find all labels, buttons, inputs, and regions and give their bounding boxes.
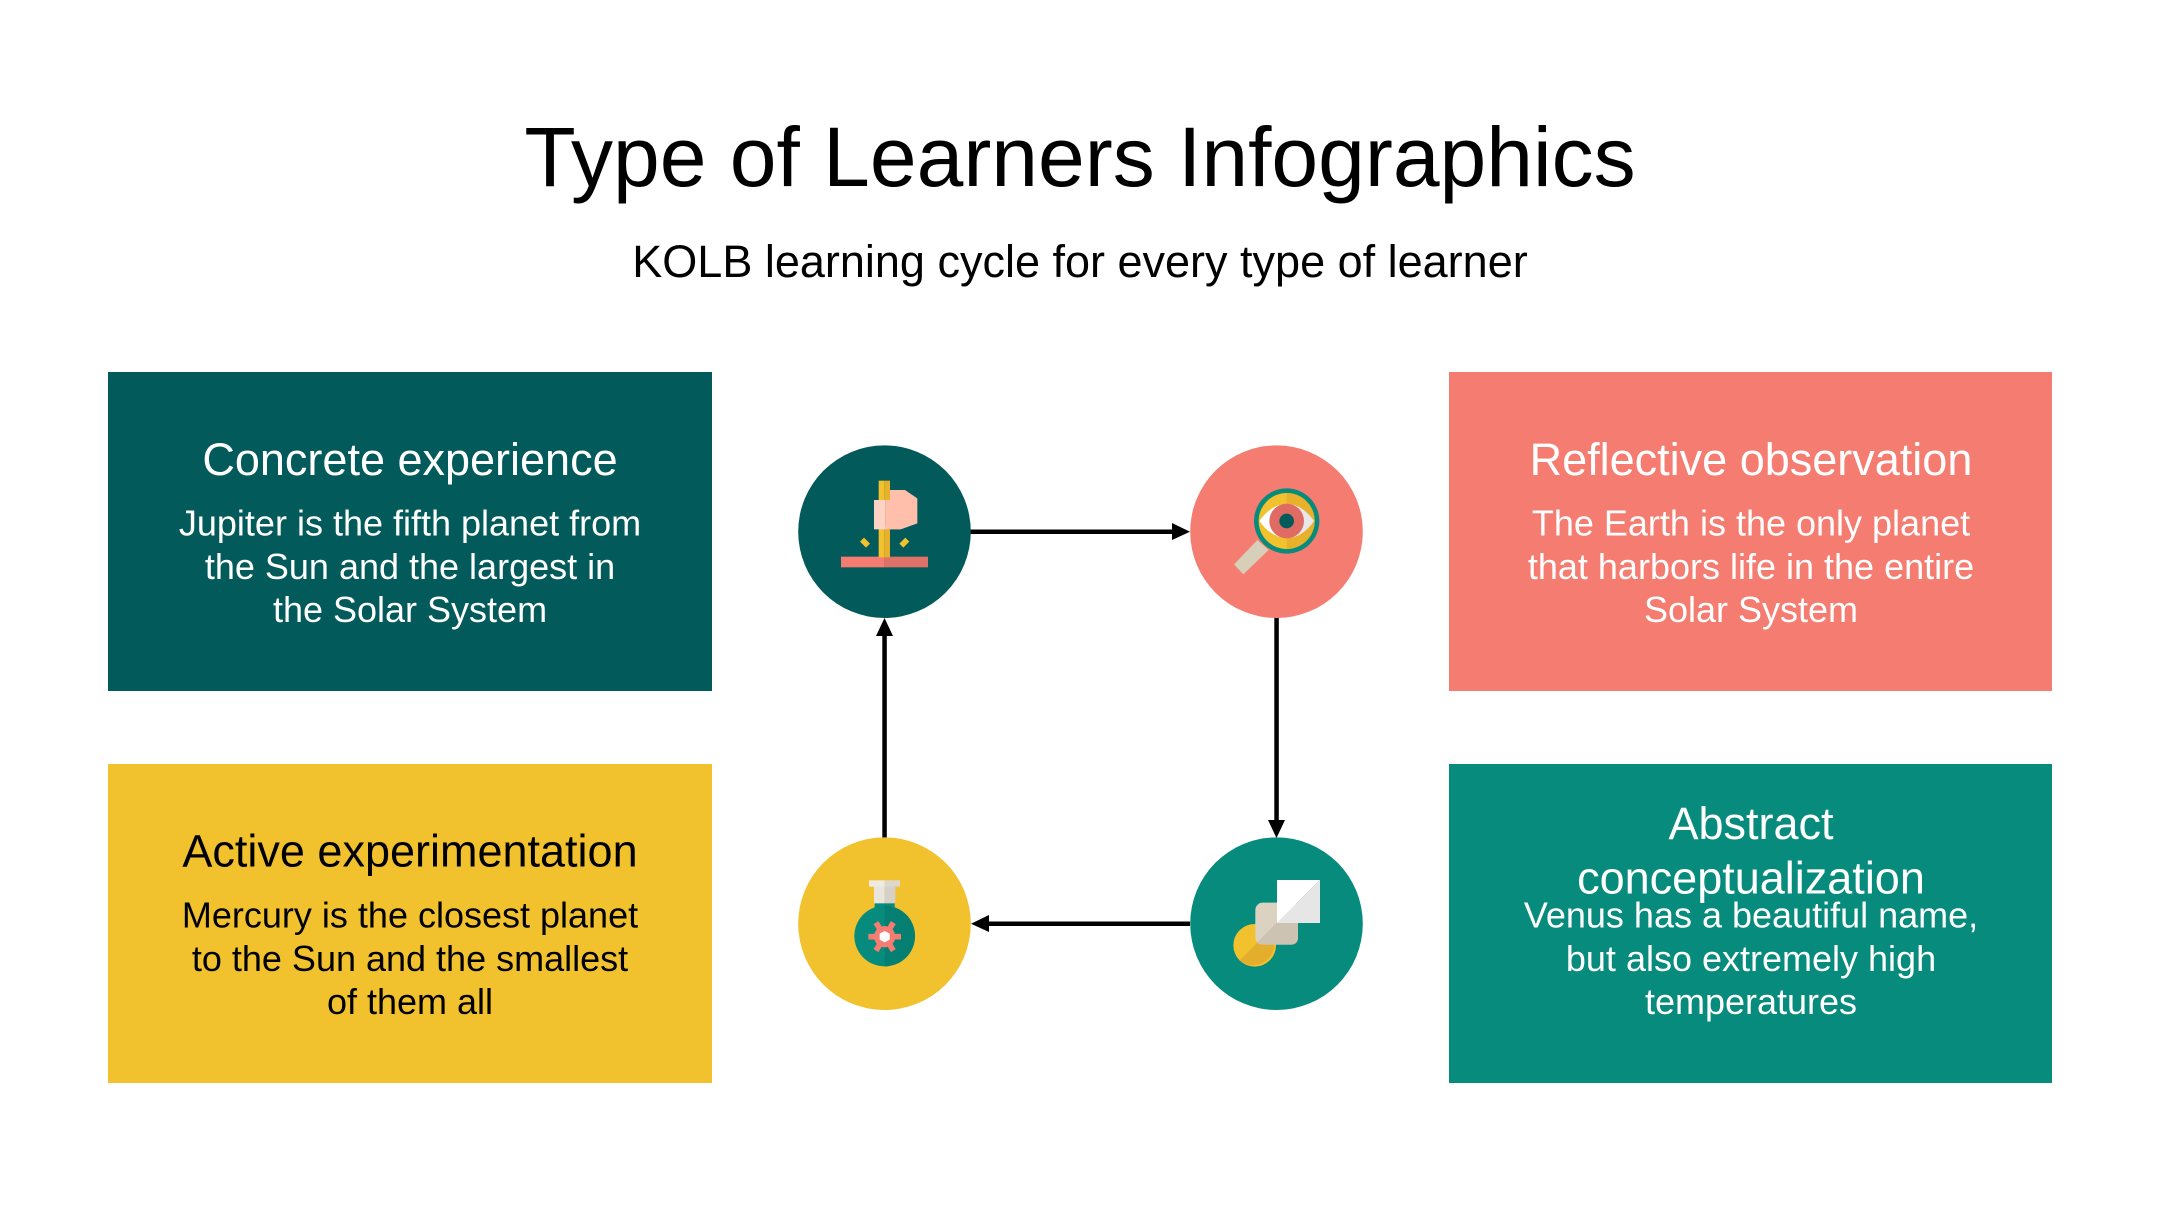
text: concrete experience description: the Solar System [273, 589, 547, 630]
text: abstract conceptualization description [1524, 894, 1978, 1022]
heading: abstract conceptualization: Abstract [1668, 798, 1834, 849]
heading: abstract conceptualization [1577, 798, 1925, 904]
arrow: abstract to active [971, 915, 1190, 932]
text: abstract conceptualization description: Venus has a beautiful name, [1524, 894, 1978, 936]
text: concrete experience description: Jupiter is the fifth planet from [179, 502, 641, 544]
text: concrete experience description: the Sun and the largest in [205, 546, 615, 587]
heading: concrete experience: Concrete experience [202, 434, 618, 485]
arrow: reflective to abstract [1268, 617, 1285, 838]
text: reflective observation description: Solar System [1644, 589, 1858, 630]
text: abstract conceptualization description: temperatures [1645, 981, 1857, 1022]
text: abstract conceptualization description: but also extremely high [1566, 938, 1936, 979]
panel: active experimentation [108, 764, 712, 1083]
text: reflective observation description: The Earth is the only planet [1532, 502, 1970, 544]
arrow: concrete to reflective [970, 523, 1190, 540]
subtitle: KOLB learning cycle for every type of learner [632, 236, 1528, 287]
heading: abstract conceptualization: conceptualization [1577, 852, 1925, 904]
text: active experimentation description: of them all [327, 981, 493, 1022]
panel: concrete experience [108, 372, 712, 691]
text: active experimentation description: Mercury is the closest planet [182, 894, 638, 936]
heading: active experimentation: Active experimentation [182, 826, 638, 876]
text: concrete experience description [179, 502, 641, 630]
panel: reflective observation [1449, 372, 2052, 691]
text: reflective observation description [1528, 502, 1974, 630]
panel: abstract conceptualization [1449, 764, 2052, 1083]
icon: flask with gear [798, 837, 971, 1010]
text: reflective observation description: that harbors life in the entire [1528, 546, 1974, 587]
icon: abstract shapes [1190, 837, 1363, 1010]
heading: reflective observation: Reflective observation [1530, 434, 1972, 485]
title: Type of Learners Infographics [524, 110, 1636, 204]
text: active experimentation description: to the Sun and the smallest [192, 938, 628, 979]
text: active experimentation description [182, 894, 638, 1022]
icon: magnifying glass with eye [1190, 445, 1363, 618]
arrow: active to concrete [876, 618, 893, 838]
icon: hand hammering stake [798, 445, 971, 618]
